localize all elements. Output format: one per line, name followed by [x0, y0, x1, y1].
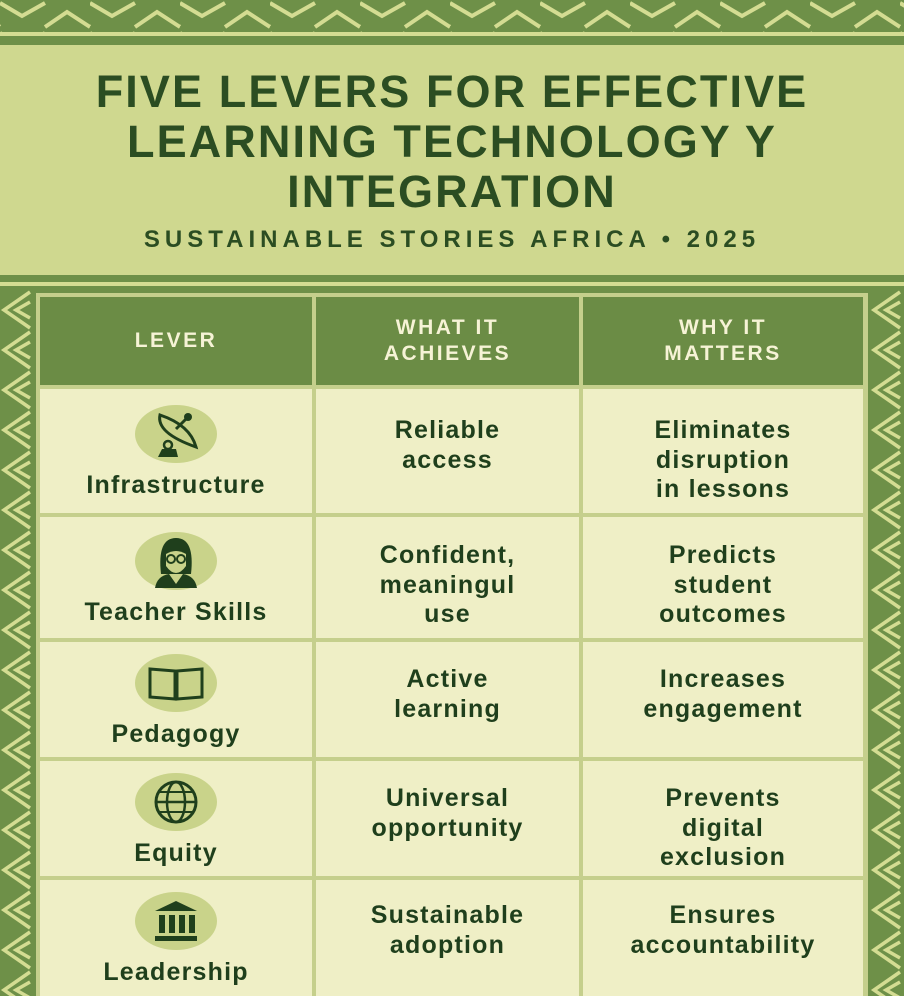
table: Confident, [380, 541, 515, 569]
table: Universal [386, 784, 509, 812]
row: Infrastructure [40, 389, 863, 513]
table: Teacher Skills [84, 598, 268, 626]
table: Pedagogy [111, 720, 241, 748]
table: WHAT IT [396, 316, 499, 339]
table: Active [406, 665, 489, 693]
left pattern [1, 290, 31, 996]
right pattern [871, 290, 901, 996]
table: Prevents [665, 784, 781, 812]
table: access [402, 446, 493, 474]
table [36, 293, 868, 996]
title panel [0, 45, 904, 275]
table: Reliable [395, 416, 500, 444]
table: opportunity [371, 814, 524, 842]
table: adoption [390, 930, 505, 958]
table: outcomes [659, 600, 787, 628]
icon: globe [135, 773, 217, 831]
header row [40, 297, 863, 385]
top pattern border [0, 1, 904, 36]
table: exclusion [660, 843, 786, 871]
subtitle: SUSTAINABLE STORIES AFRICA • 2025 [144, 226, 760, 253]
table: Eliminates [654, 416, 792, 444]
title [96, 66, 808, 217]
table: digital [682, 814, 764, 842]
icon: institution [135, 892, 217, 950]
table: use [424, 600, 471, 628]
table: Predicts [669, 541, 777, 569]
table: LEVER [135, 329, 217, 352]
table: disruption [656, 446, 790, 474]
title: FIVE LEVERS FOR EFFECTIVE [96, 66, 808, 117]
table: Equity [134, 839, 218, 867]
table: WHY IT [679, 316, 767, 339]
title: LEARNING TECHNOLOGY Y [127, 116, 777, 167]
row: Equity [40, 761, 863, 876]
icon: teacher [135, 532, 217, 590]
table: Ensures [669, 901, 777, 929]
table: ACHIEVES [384, 342, 511, 365]
table: MATTERS [664, 342, 782, 365]
row: Leadership [40, 880, 863, 996]
table: engagement [643, 694, 803, 722]
icon: book [135, 654, 217, 712]
table: student [674, 570, 772, 598]
table: meaningul [380, 570, 515, 598]
table: accountability [631, 930, 815, 958]
table: learning [394, 694, 501, 722]
table: Leadership [103, 958, 249, 986]
table: Increases [660, 665, 786, 693]
table: Sustainable [371, 901, 524, 929]
row: Teacher Skills [40, 517, 863, 638]
table: Infrastructure [86, 471, 266, 499]
icon: satellite dish [135, 405, 217, 463]
row: Pedagogy [40, 642, 863, 757]
table: in lessons [656, 475, 790, 503]
title: INTEGRATION [287, 166, 617, 217]
